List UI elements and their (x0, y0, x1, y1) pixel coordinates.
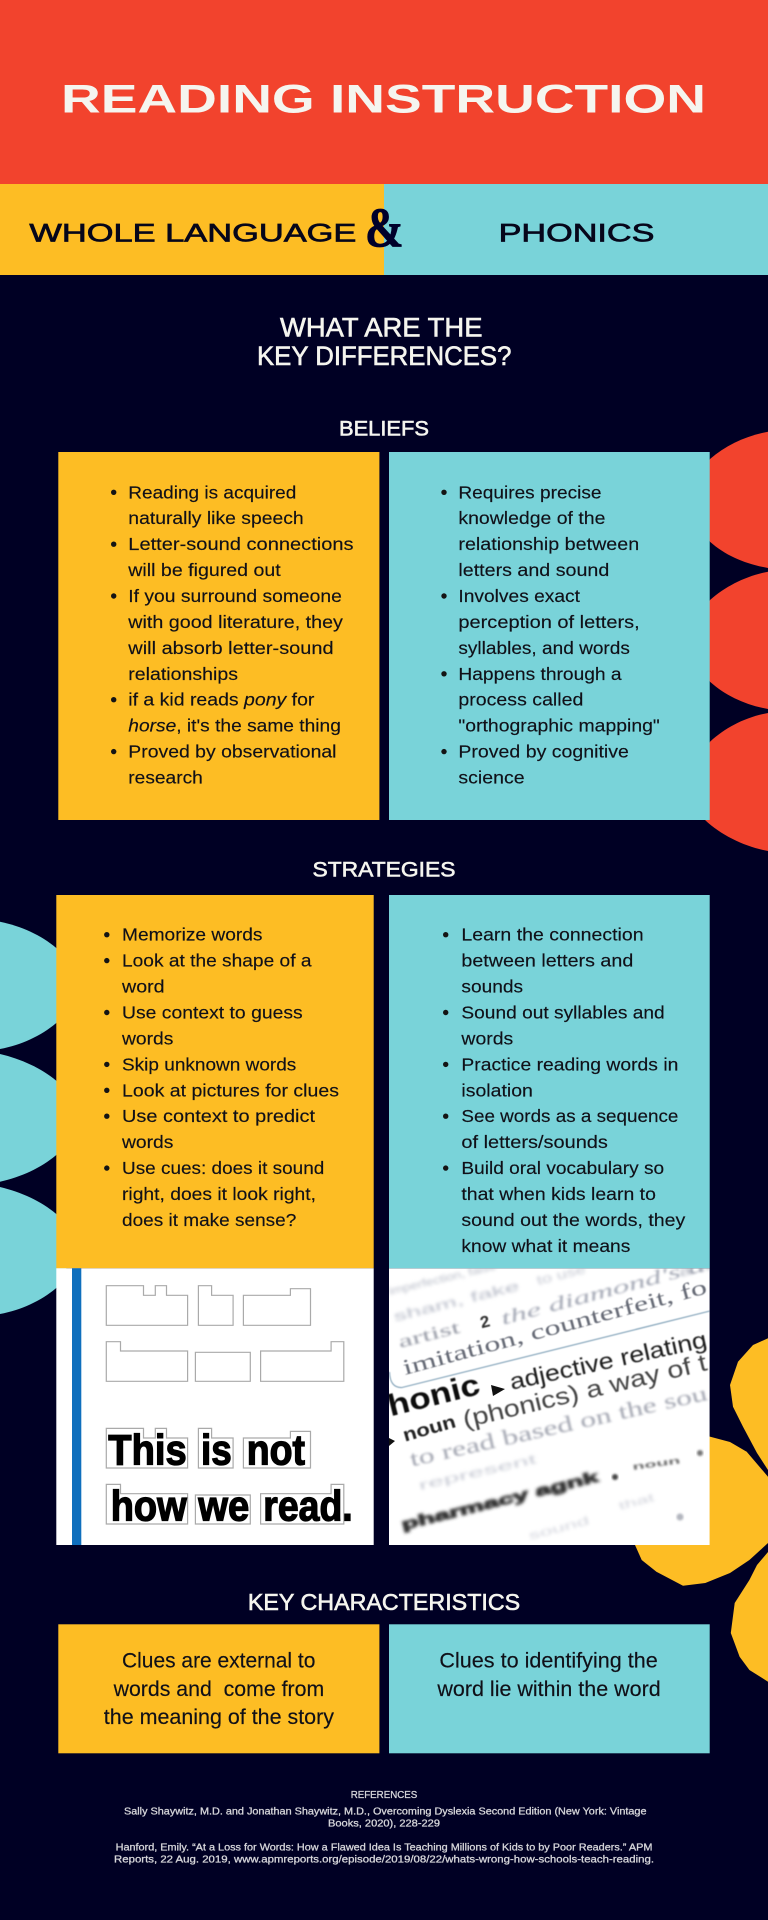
strategy list: Use cues: does it sound (122, 1158, 324, 1178)
strategy list: know what it means (461, 1236, 631, 1256)
characteristic text (436, 1650, 661, 1701)
panel: beliefs whole language (58, 452, 379, 820)
strategy list: Skip unknown words (122, 1054, 297, 1074)
strategy list: does it make sense? (122, 1210, 297, 1230)
belief list: letters and sound (458, 560, 609, 580)
subtitle (257, 313, 511, 371)
definition lines: (phonics) a way of t (460, 1350, 710, 1434)
blurred lower lines (400, 1450, 703, 1543)
strategy list: word (121, 977, 165, 997)
panel: key characteristic phonics (389, 1624, 710, 1753)
strategy list: words (460, 1028, 514, 1048)
belief list: Proved by cognitive (458, 742, 629, 762)
strategy list: sounds (461, 977, 523, 997)
strategy list (460, 925, 686, 1256)
bullets (111, 490, 116, 754)
panel: key characteristic whole language (58, 1624, 379, 1753)
blurred lower lines: represent (417, 1451, 538, 1493)
caption: this is not how we read (108, 1426, 353, 1531)
belief list: with good literature, they (127, 612, 343, 632)
blurred upper lines: to use (535, 1261, 587, 1288)
belief list: "orthographic mapping" (458, 716, 660, 736)
subtitle: KEY DIFFERENCES? (257, 341, 511, 371)
caption: this is not how we read: not (247, 1426, 305, 1474)
belief list: Letter-sound connections (128, 534, 354, 554)
definition lines (401, 1326, 710, 1472)
belief list: relationship between (458, 534, 639, 554)
image: word shape outlines (56, 1268, 374, 1545)
blurred upper lines: a fi (677, 1257, 712, 1280)
blurred lower lines: pharmacy agnk (400, 1468, 601, 1534)
strategy list: Memorize words (122, 925, 263, 945)
whole language side: WHOLE LANGUAGE (29, 219, 356, 247)
belief list: horse, it's the same thing (128, 716, 341, 736)
bullets (104, 932, 110, 1171)
characteristic text: the meaning of the story (104, 1706, 334, 1729)
caption: this is not how we read: read. (263, 1483, 353, 1531)
whole language side (0, 184, 384, 275)
characteristic text: word lie within the word (436, 1678, 661, 1701)
blue side bar (72, 1268, 81, 1545)
strategy list: Build oral vocabulary so (461, 1158, 664, 1178)
strategy list: Use context to guess (122, 1002, 303, 1022)
image: dictionary entry for phonic (389, 1268, 710, 1545)
panel: beliefs phonics (389, 452, 710, 820)
definition lines: to read based on the sou (407, 1380, 709, 1472)
phonics side: PHONICS (499, 219, 654, 247)
strategy list: Use context to predict (122, 1106, 315, 1126)
references: Books, 2020), 228-229 (328, 1818, 440, 1830)
header banner (0, 0, 768, 184)
filled word shapes outlines (106, 1428, 344, 1524)
references: REFERENCES (351, 1789, 417, 1801)
belief list: if a kid reads pony for (128, 690, 315, 710)
blurred upper lines: sham, fake (392, 1277, 521, 1325)
panel: strategies phonics (389, 895, 710, 1268)
belief list: science (458, 768, 525, 788)
blurred upper lines: imperfection, false (388, 1261, 498, 1298)
belief list: perception of letters, (458, 612, 640, 632)
strategy list: of letters/sounds (461, 1132, 608, 1152)
definition lines: adjective relating (507, 1326, 709, 1395)
strategy list: Learn the connection (461, 925, 644, 945)
bullets (443, 932, 448, 1171)
definition box line (390, 1311, 710, 1388)
belief list: will absorb letter-sound (127, 638, 334, 658)
belief list: Involves exact (458, 586, 580, 606)
belief list: syllables, and words (458, 638, 630, 658)
belief list: Proved by observational (128, 742, 336, 762)
strategy list: Look at the shape of a (122, 951, 312, 971)
characteristic text (104, 1650, 334, 1729)
belief list: If you surround someone (128, 586, 342, 606)
subtitle: WHAT ARE THE (280, 313, 482, 343)
caption: this is not how we read: how (111, 1483, 187, 1531)
caption: this is not how we read: is (201, 1426, 232, 1474)
blurred lower lines: sound (527, 1513, 591, 1543)
strategy list: words (121, 1028, 174, 1048)
belief list: relationships (128, 664, 238, 684)
references: Sally Shaywitz, M.D. and Jonathan Shaywitz, M.D., Overcoming Dyslexia Second Edition (New York: Vintage (124, 1805, 647, 1817)
decoration: teal petals (0, 922, 75, 1314)
strategy list: between letters and (461, 951, 633, 971)
blurred lower lines: that (618, 1492, 656, 1513)
caption: this is not how we read: we (197, 1483, 249, 1531)
strategy list: that when kids learn to (461, 1184, 656, 1204)
belief list (127, 482, 354, 788)
pointer triangles (389, 1385, 505, 1446)
blurred lower lines: noun (632, 1455, 681, 1472)
strategy list: Look at pictures for clues (122, 1080, 339, 1100)
heading: key characteristics: KEY CHARACTERISTICS (248, 1589, 520, 1615)
strategy list: Practice reading words in (461, 1054, 678, 1074)
strategy list: isolation (461, 1080, 533, 1100)
caption: this is not how we read: This (108, 1426, 187, 1474)
definition lines: noun (401, 1411, 458, 1446)
heading: beliefs: BELIEFS (339, 416, 429, 440)
characteristic text: Clues to identifying the (439, 1650, 658, 1673)
blurred upper lines: 2 (478, 1311, 492, 1332)
decoration: red petals (690, 432, 768, 851)
title: READING INSTRUCTION (61, 78, 706, 122)
belief list: research (128, 768, 203, 788)
blurred upper lines: artist (396, 1317, 462, 1352)
belief list: Requires precise (458, 482, 602, 502)
blurred upper lines: the diamond's a (499, 1255, 707, 1330)
strategy list (121, 925, 339, 1230)
belief list: will be figured out (127, 560, 281, 580)
strategy list: Sound out syllables and (461, 1002, 665, 1022)
strategy list: See words as a sequence (461, 1106, 678, 1126)
headword: phonic (363, 1367, 483, 1428)
strategy list: words (121, 1132, 174, 1152)
phonics side (384, 184, 768, 275)
belief list (458, 482, 660, 788)
panel: strategies whole language (56, 895, 374, 1268)
blurred upper lines (389, 1268, 710, 1376)
decoration: yellow flower (620, 1338, 768, 1682)
characteristic text: words and come from (113, 1678, 324, 1701)
strategy list: sound out the words, they (461, 1210, 686, 1230)
strategy list: right, does it look right, (122, 1184, 316, 1204)
references (114, 1789, 654, 1865)
belief list: Reading is acquired (128, 482, 296, 502)
bullets (441, 490, 447, 754)
belief list: process called (458, 690, 583, 710)
blurred upper lines: imitation, counterfeit, fo (400, 1274, 709, 1380)
references: Hanford, Emily. “At a Loss for Words: How a Flawed Idea Is Teaching Millions of Kids to by Poor Readers.” APM (116, 1842, 652, 1854)
belief list: knowledge of the (458, 508, 605, 528)
empty word shapes (106, 1286, 344, 1381)
heading: strategies: STRATEGIES (312, 858, 456, 882)
comparison band (0, 184, 768, 275)
characteristic text: Clues are external to (122, 1650, 315, 1673)
belief list: naturally like speech (128, 508, 304, 528)
references: Reports, 22 Aug. 2019, www.apmreports.org/episode/2019/08/22/whats-wrong-how-schools-teach-reading. (114, 1853, 654, 1865)
ampersand: & (365, 198, 404, 260)
belief list: Happens through a (458, 664, 622, 684)
